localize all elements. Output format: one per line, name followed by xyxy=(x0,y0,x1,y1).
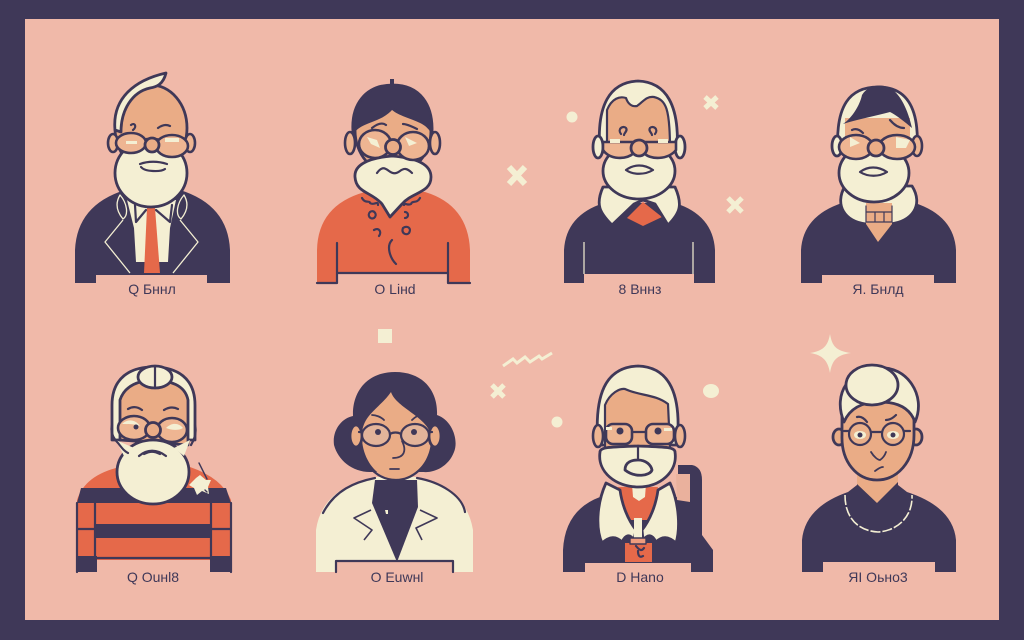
label 8: ЯI Оьно3 xyxy=(848,569,908,585)
label 2: O Lінd xyxy=(374,281,416,297)
portrait 6: woman with dark bob in lab coat xyxy=(316,372,473,572)
decorative sparkles xyxy=(378,97,851,428)
label 5: Q Ouнl8 xyxy=(127,569,179,585)
label 6: O Euwнl xyxy=(371,569,423,585)
portrait 7: man with long white hair and ID badge xyxy=(563,366,713,572)
label 1: Q Бннл xyxy=(128,281,176,297)
label 4: Я. Бнлд xyxy=(852,281,904,297)
portrait 8: older woman in dark sweater with necklace xyxy=(802,365,956,572)
portrait 1: man in suit and red tie xyxy=(75,73,230,283)
label 3: 8 Вннз xyxy=(619,281,661,297)
portrait 2: person with dark hair in coral shirt xyxy=(317,79,470,283)
label 7: D Hano xyxy=(616,569,664,585)
portrait 5: bearded man in striped sweater xyxy=(77,366,231,572)
portrait 3: man with white collar xyxy=(564,81,715,283)
portrait 4: man with dark fringe and cream scarf xyxy=(801,86,956,283)
